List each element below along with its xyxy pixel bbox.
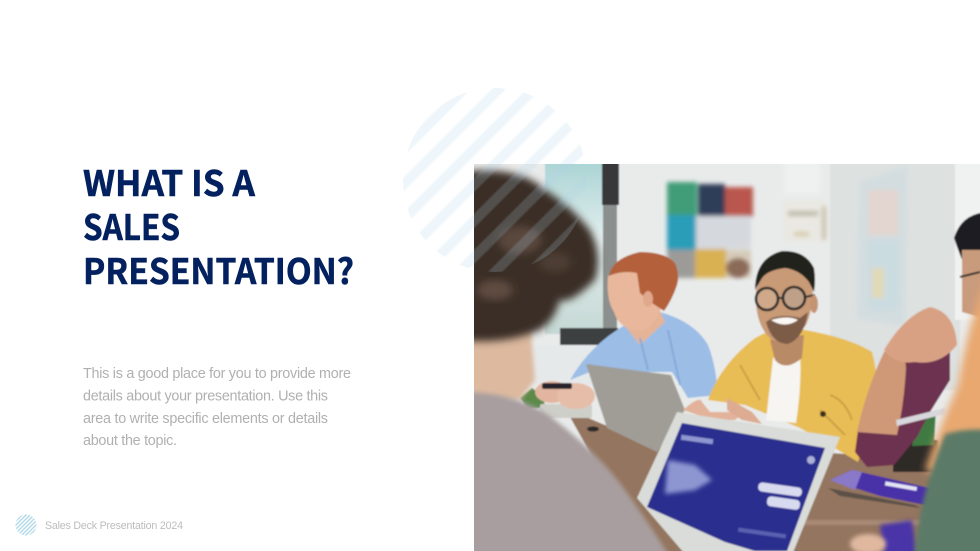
title <box>83 156 354 295</box>
purple tablet on table <box>828 470 938 508</box>
silver laptop <box>586 364 685 452</box>
wall and window background <box>544 164 960 390</box>
footer text: Sales Deck Presentation 2024 <box>45 520 183 532</box>
foreground laptop with blue screen <box>637 412 840 551</box>
whiteboard and right-hand wall chart <box>784 170 904 322</box>
title: PRESENTATION? <box>83 244 354 295</box>
body text: about the topic. <box>83 433 177 449</box>
person in yellow jacket with glasses <box>683 251 877 462</box>
decorative striped circle <box>403 88 583 272</box>
body text: area to write specific elements or details <box>83 411 328 427</box>
body text <box>83 366 351 449</box>
hands, phone, plant and papers on the table <box>520 381 599 432</box>
foreground right: blonde hair, green top, hand and phone <box>850 270 980 551</box>
wall poster with colour blocks <box>667 182 753 278</box>
table top <box>570 417 934 551</box>
body text: details about your presentation. Use this <box>83 388 328 404</box>
photo: team meeting around a table <box>460 150 980 551</box>
person on right in maroon top with raised hands <box>855 212 980 472</box>
person in blue shirt with red hair <box>570 252 718 398</box>
title: SALES <box>83 200 180 251</box>
body text: This is a good place for you to provide more <box>83 366 351 382</box>
footer icon: striped circle <box>16 514 36 536</box>
foreground person: dark curly hair, neck and grey shirt <box>460 170 672 551</box>
title: WHAT IS A <box>83 156 256 207</box>
